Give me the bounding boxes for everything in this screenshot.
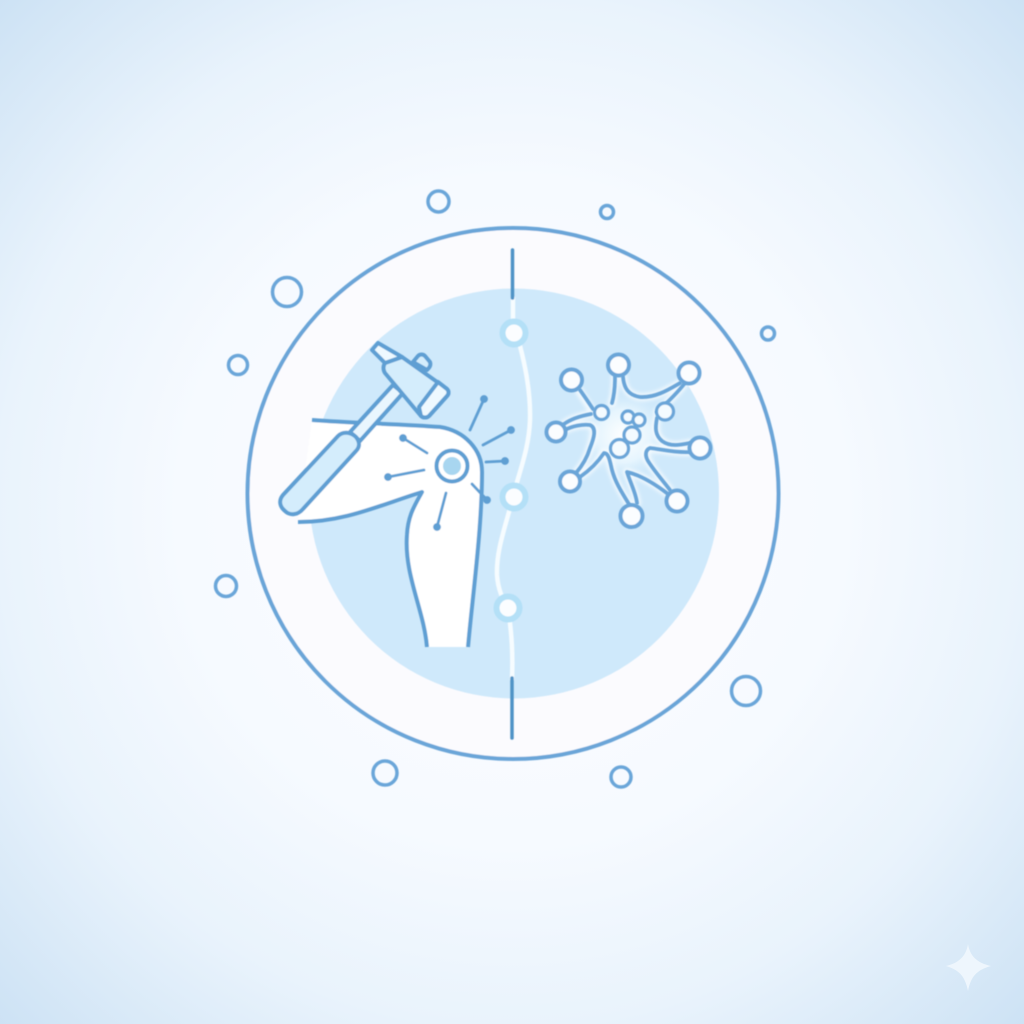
knee with reflex hammer (280, 343, 514, 647)
terminal nodes (546, 354, 710, 527)
floating bubbles (216, 191, 774, 787)
hammer (280, 343, 448, 514)
tip (372, 343, 402, 363)
face band (419, 382, 448, 418)
sparkle watermark (946, 944, 991, 991)
leg (298, 420, 482, 647)
divider top segment (511, 250, 514, 298)
cell body glow (580, 392, 668, 480)
divider bottom segment (510, 678, 514, 738)
white wavy line (497, 297, 530, 680)
dendrites (564, 377, 690, 506)
head (384, 357, 448, 418)
inner organelles (594, 403, 674, 458)
nodes (496, 322, 526, 620)
grip (280, 433, 359, 514)
central divider (496, 250, 530, 738)
joint (436, 450, 468, 482)
dendrite halo (564, 377, 690, 506)
impact rays (386, 396, 514, 530)
outer ring (248, 228, 778, 759)
shaft (350, 385, 403, 441)
main circle (248, 228, 778, 759)
neuron (546, 354, 710, 527)
inner blue disc (309, 288, 719, 698)
button (413, 354, 430, 370)
